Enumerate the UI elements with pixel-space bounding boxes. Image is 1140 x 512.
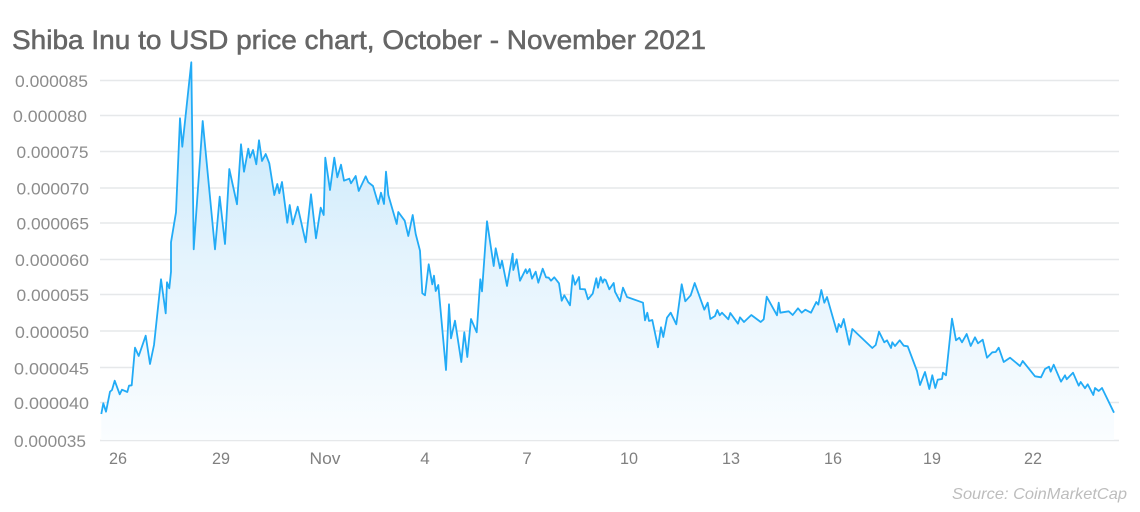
x axis labels: 19	[923, 449, 941, 468]
area fill	[101, 62, 1114, 440]
y axis labels	[13, 72, 89, 451]
y axis labels: 0.000080	[13, 107, 87, 126]
x axis labels: 4	[420, 449, 430, 468]
title: Shiba Inu to USD price chart, October - November 2021	[12, 25, 706, 55]
price area and line chart	[101, 62, 1114, 440]
x axis labels	[109, 449, 1042, 468]
y axis labels: 0.000085	[15, 72, 88, 91]
x axis labels: 16	[824, 449, 842, 468]
y axis labels: 0.000060	[15, 251, 89, 270]
x axis labels: 10	[620, 449, 638, 468]
x axis labels: 26	[109, 449, 127, 468]
x axis labels: 7	[522, 449, 532, 468]
price line	[101, 62, 1114, 414]
x axis labels: 29	[212, 449, 230, 468]
y axis labels: 0.000035	[14, 432, 86, 451]
source note: Source: CoinMarketCap	[952, 486, 1127, 503]
x axis labels: 22	[1024, 449, 1042, 468]
y axis labels: 0.000050	[15, 323, 89, 342]
y axis labels: 0.000045	[14, 360, 89, 378]
x axis labels: 13	[722, 449, 740, 468]
y axis labels: 0.000070	[16, 180, 89, 198]
y axis labels: 0.000075	[16, 143, 88, 162]
y axis labels: 0.000065	[16, 214, 89, 234]
x axis labels: Nov	[310, 449, 341, 468]
y axis labels: 0.000055	[16, 286, 89, 305]
y axis labels: 0.000040	[14, 394, 89, 413]
